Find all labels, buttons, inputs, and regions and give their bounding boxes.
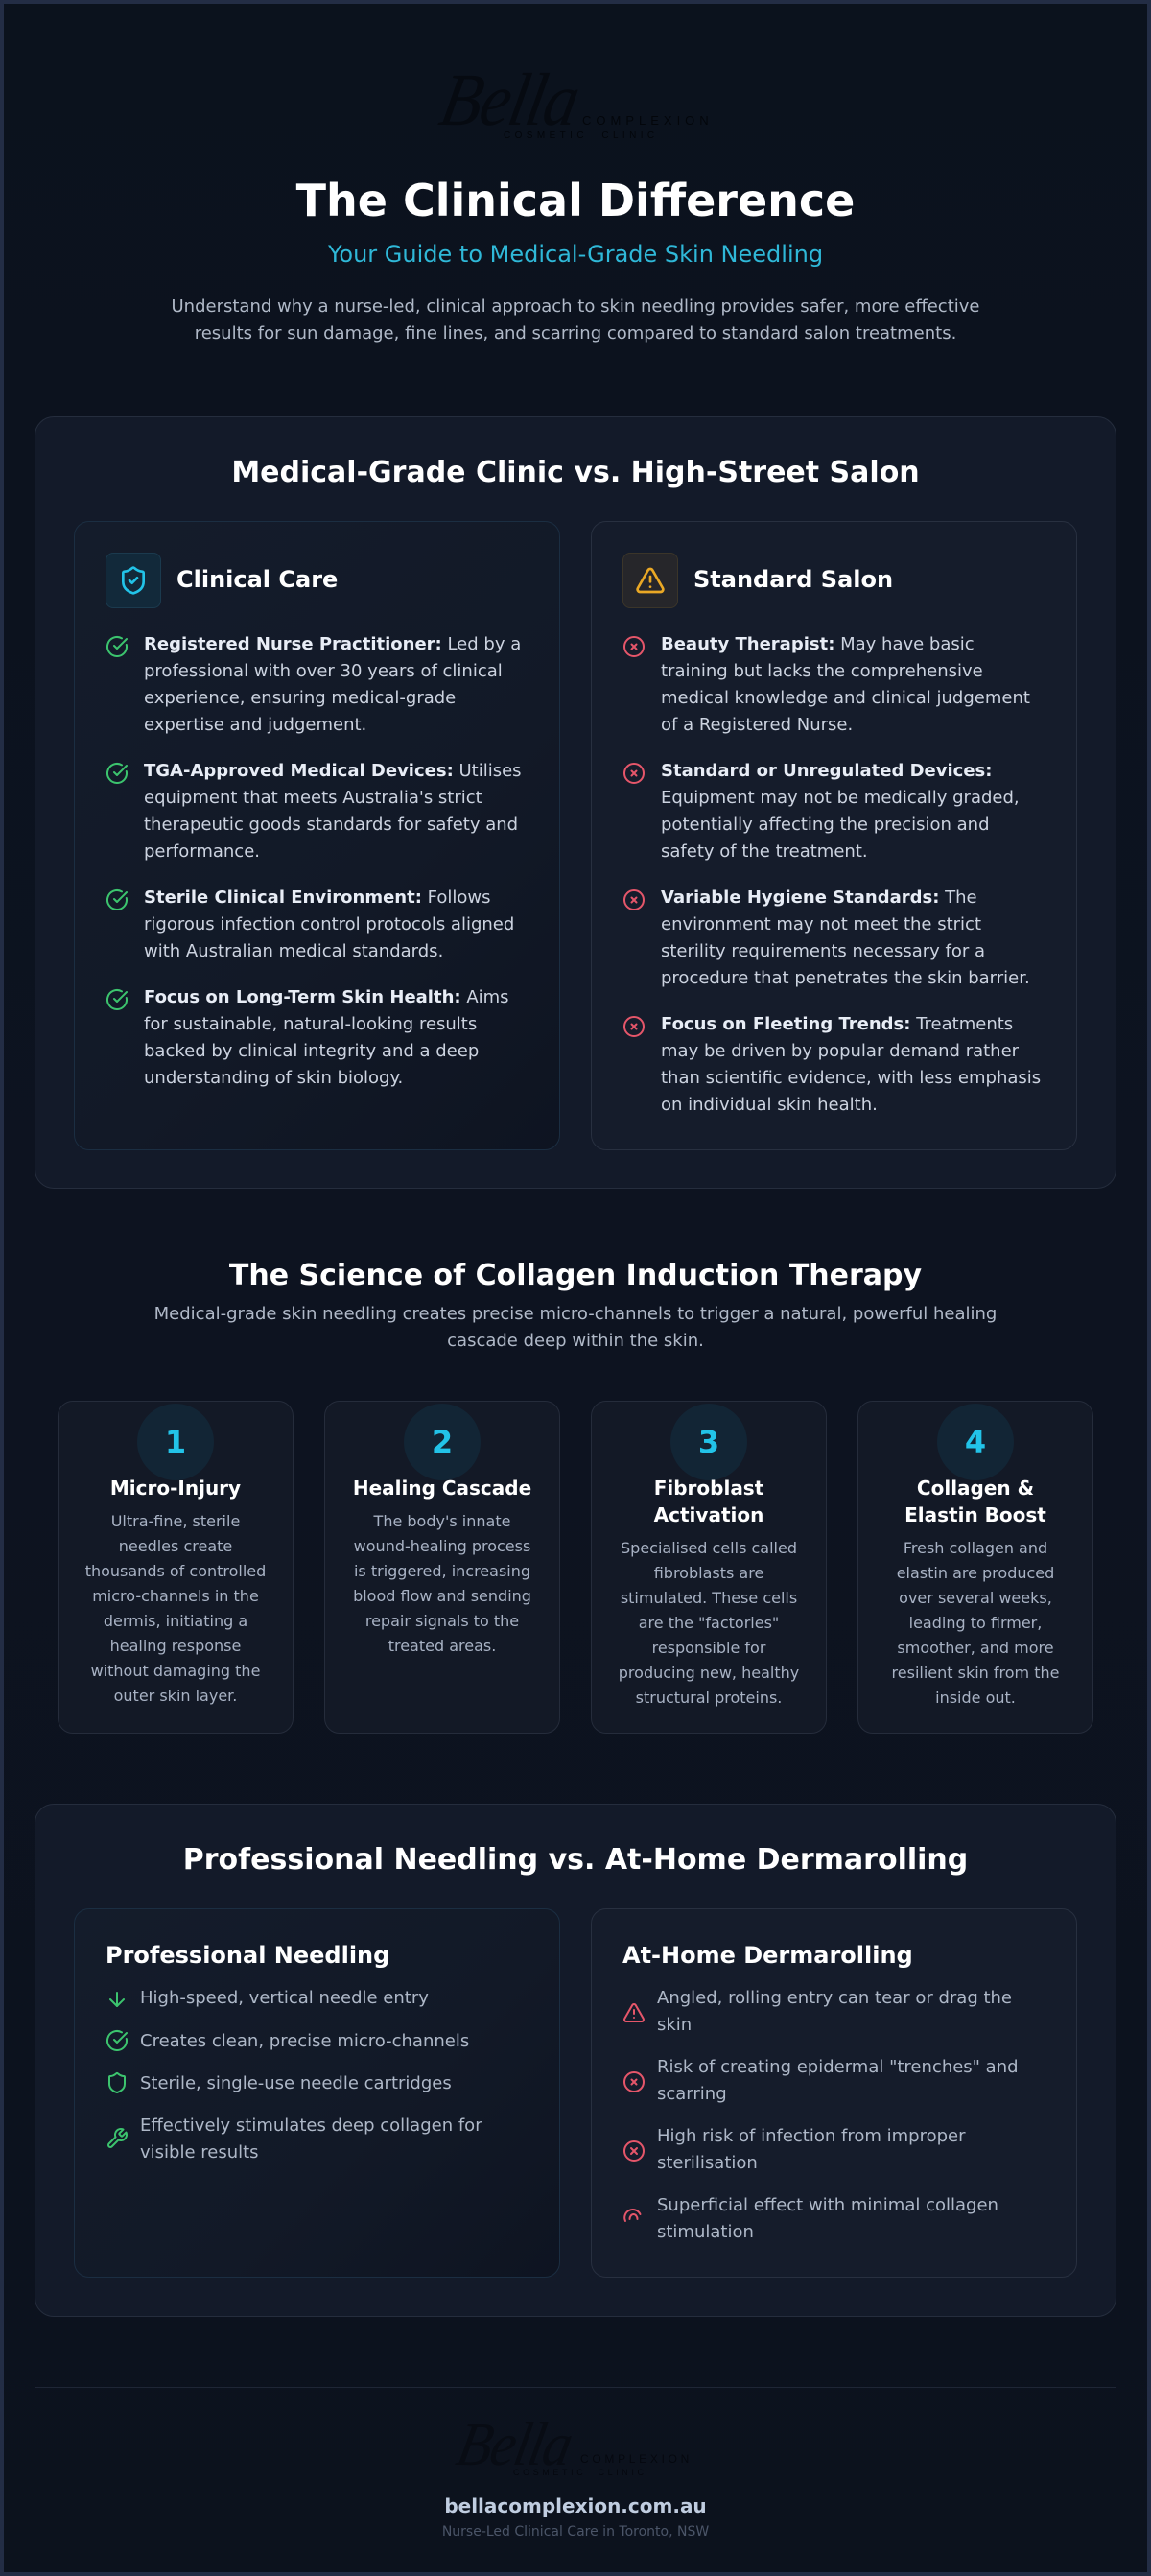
- list item: sterile environment: rigorous infection control protocols aligned: [144, 914, 514, 934]
- heading: at-home dermarolling: At-Home Dermarolling: [622, 1942, 913, 1969]
- list item: sterile environment: with Australian medical standards.: [144, 941, 443, 961]
- step text: Fresh collagen and: [904, 1539, 1047, 1557]
- step text: repair signals to the: [365, 1612, 519, 1630]
- list item: unregulated devices: Standard or Unregulated Devices:: [661, 760, 992, 781]
- step title: Activation: [654, 1503, 763, 1526]
- item: superficial effect: stimulation: [657, 2222, 754, 2242]
- footer logo: COMPLEXION: [580, 2452, 693, 2466]
- step text: producing new, healthy: [619, 1664, 799, 1682]
- step 3 card: [591, 1401, 827, 1734]
- icon: cross: [623, 636, 645, 657]
- item: superficial effect: [657, 2195, 998, 2242]
- step text: structural proteins.: [636, 1689, 782, 1707]
- list item: beauty therapist: of a Registered Nurse.: [661, 715, 853, 735]
- list item: long-term skin health: Focus on Long-Term Skin Health: Aims: [144, 986, 509, 1007]
- list item: beauty therapist: Beauty Therapist: May have basic: [661, 633, 975, 654]
- list item: hygiene: [661, 886, 1030, 988]
- step 1 card: [58, 1401, 294, 1734]
- list item: registered nurse: experience, ensuring medical-grade: [144, 688, 456, 708]
- intro text: results for sun damage, fine lines, and scarring compared to standard salon treatments.: [195, 323, 956, 343]
- header logo: COMPLEXION: [582, 113, 714, 128]
- list item: unregulated devices: potentially affecting the precision and: [661, 815, 990, 835]
- list item: beauty therapist: medical knowledge and clinical judgement: [661, 688, 1030, 708]
- science intro text: Medical-grade skin needling creates precise micro-channels to trigger a natural, powerful healing: [154, 1304, 997, 1324]
- list item: beauty therapist: training but lacks the comprehensive: [661, 661, 983, 681]
- step title: Micro-Injury: [110, 1477, 241, 1500]
- list item: sterile environment: [144, 886, 514, 961]
- list item: TGA devices: [144, 760, 522, 862]
- list item: fleeting trends: than scientific evidence, with less emphasis: [661, 1068, 1041, 1088]
- icon: check: [106, 988, 128, 1010]
- list item: registered nurse: professional with over 30 years of clinical: [144, 661, 503, 681]
- footer logo: [452, 2410, 693, 2478]
- list item: hygiene: environment may not meet the strict: [661, 914, 981, 934]
- item: cartridges: Sterile, single-use needle cartridges: [140, 2072, 452, 2093]
- heading: needling vs dermarolling: Professional Needling vs. At-Home Dermarolling: [183, 1842, 968, 1877]
- list item: long-term skin health: backed by clinical integrity and a deep: [144, 1041, 479, 1061]
- list item: registered nurse: Registered Nurse Practitioner: Led by a: [144, 633, 521, 654]
- icon: cross: [623, 763, 645, 784]
- step text: treated areas.: [388, 1637, 496, 1655]
- step 2 card: [324, 1401, 560, 1734]
- step text: responsible for: [652, 1639, 765, 1657]
- step text: [619, 1539, 799, 1707]
- list item: registered nurse: expertise and judgement.: [144, 715, 366, 735]
- step title: Fibroblast: [654, 1477, 763, 1500]
- step text: healing response: [110, 1637, 241, 1655]
- heading: clinic vs salon: Medical-Grade Clinic vs. High-Street Salon: [231, 455, 920, 489]
- step text: [353, 1512, 531, 1655]
- item: infection: High risk of infection from improper: [657, 2126, 965, 2146]
- item: deep collagen: [140, 2115, 482, 2162]
- list item: sterile environment: Sterile Clinical Environment: Follows: [144, 886, 490, 908]
- icon: cross: [623, 889, 645, 910]
- step text: resilient skin from the: [892, 1664, 1059, 1682]
- step text: blood flow and sending: [353, 1587, 531, 1605]
- footer logo: COSMETIC CLINIC: [513, 2468, 647, 2477]
- list item: TGA devices: therapeutic goods standards for safety and: [144, 815, 518, 835]
- panel: clinic vs salon: [35, 416, 1116, 1189]
- list item: TGA devices: equipment that meets Australia's strict: [144, 788, 482, 808]
- card: at-home dermarolling: [591, 1908, 1077, 2278]
- icon: warning: [623, 2003, 645, 2022]
- list item: long-term skin health: understanding of skin biology.: [144, 1068, 403, 1088]
- header logo: Bella: [434, 58, 585, 141]
- heading: collagen science: The Science of Collagen Induction Therapy: [229, 1259, 922, 1292]
- step text: is triggered, increasing: [354, 1562, 530, 1580]
- step text: elastin are produced: [897, 1564, 1054, 1582]
- step number: [137, 1404, 214, 1480]
- step number: 3: [698, 1424, 719, 1460]
- item: angled entry: skin: [657, 2015, 692, 2035]
- step text: dermis, initiating a: [104, 1612, 247, 1630]
- icon: wrench: [107, 2128, 128, 2148]
- item: superficial effect: Superficial effect with minimal collagen: [657, 2195, 998, 2215]
- icon: warning triangle: [622, 553, 678, 608]
- title: The Clinical Difference: [296, 175, 855, 226]
- item: micro-channels: Creates clean, precise micro-channels: [140, 2030, 469, 2051]
- icon: cross: [623, 2140, 645, 2162]
- step title: [654, 1477, 763, 1526]
- step text: without damaging the: [91, 1662, 260, 1680]
- step number: [670, 1404, 747, 1480]
- list item: beauty therapist: [661, 633, 1030, 735]
- science intro text: cascade deep within the skin.: [447, 1331, 704, 1351]
- icon: cross: [623, 1016, 645, 1037]
- step number: [937, 1404, 1014, 1480]
- icon: gauge: [623, 2209, 641, 2222]
- list item: long-term skin health: for sustainable, natural-looking results: [144, 1014, 477, 1034]
- item: trenches: scarring: [657, 2084, 727, 2104]
- card: standard salon: [591, 521, 1077, 1150]
- list item: hygiene: procedure that penetrates the skin barrier.: [661, 968, 1030, 988]
- item: angled entry: Angled, rolling entry can tear or drag the: [657, 1988, 1012, 2008]
- list item: unregulated devices: Equipment may not be medically graded,: [661, 788, 1020, 808]
- step title: Healing Cascade: [353, 1477, 531, 1500]
- icon: check: [106, 635, 128, 657]
- step text: [85, 1512, 266, 1705]
- item: vertical entry: High-speed, vertical needle entry: [140, 1988, 429, 2008]
- footer logo: Bella: [452, 2410, 577, 2478]
- item: trenches: Risk of creating epidermal "trenches" and: [657, 2057, 1019, 2077]
- header logo: [434, 58, 714, 141]
- icon: check: [106, 762, 128, 784]
- card: clinical care: [74, 521, 560, 1150]
- step text: Ultra-fine, sterile: [111, 1512, 240, 1530]
- panel: needling vs dermarolling: [35, 1804, 1116, 2317]
- footer website: bellacomplexion.com.au: [444, 2494, 707, 2517]
- step text: [892, 1539, 1059, 1707]
- science intro text: [154, 1304, 997, 1351]
- step text: stimulated. These cells: [621, 1589, 797, 1607]
- icon: arrow down: [109, 1992, 125, 2007]
- item: deep collagen: visible results: [140, 2142, 259, 2162]
- list item: unregulated devices: safety of the treatment.: [661, 841, 868, 862]
- heading: clinical care: Clinical Care: [176, 566, 338, 593]
- step text: outer skin layer.: [114, 1687, 237, 1705]
- step text: inside out.: [935, 1689, 1016, 1707]
- step text: thousands of controlled: [85, 1562, 266, 1580]
- step text: leading to firmer,: [909, 1614, 1042, 1632]
- step text: wound-healing process: [354, 1537, 530, 1555]
- list item: hygiene: Variable Hygiene Standards: The: [661, 886, 977, 908]
- step number: 1: [165, 1424, 186, 1460]
- step number: [404, 1404, 481, 1480]
- item: angled entry: [657, 1988, 1012, 2035]
- step 4 card: [857, 1401, 1093, 1734]
- list item: fleeting trends: on individual skin health.: [661, 1095, 878, 1115]
- subtitle: Your Guide to Medical-Grade Skin Needling: [328, 241, 823, 268]
- list item: TGA devices: TGA-Approved Medical Devices: Utilises: [144, 760, 522, 781]
- step number: 4: [965, 1424, 986, 1460]
- step text: Specialised cells called: [621, 1539, 797, 1557]
- list item: hygiene: sterility requirements necessary for a: [661, 941, 985, 961]
- item: deep collagen: Effectively stimulates deep collagen for: [140, 2115, 482, 2136]
- footer tagline: Nurse-Led Clinical Care in Toronto, NSW: [442, 2524, 709, 2540]
- header logo: COSMETIC CLINIC: [504, 130, 659, 141]
- icon: check: [106, 2030, 128, 2051]
- list item: fleeting trends: may be driven by popular demand rather: [661, 1041, 1019, 1061]
- item: trenches: [657, 2057, 1019, 2104]
- step text: fibroblasts are: [654, 1564, 763, 1582]
- step title: Collagen &: [917, 1477, 1034, 1500]
- list item: TGA devices: performance.: [144, 841, 260, 862]
- step text: over several weeks,: [899, 1589, 1052, 1607]
- icon: shield: [108, 2072, 126, 2093]
- list item: unregulated devices: [661, 760, 1020, 862]
- list item: long-term skin health: [144, 986, 509, 1088]
- card: professional needling: [74, 1908, 560, 2278]
- icon: shield check: [106, 553, 161, 608]
- intro text: Understand why a nurse-led, clinical approach to skin needling provides safer, more effective: [171, 295, 980, 317]
- list item: fleeting trends: [661, 1013, 1041, 1115]
- list item: registered nurse: [144, 633, 521, 735]
- heading: standard salon: Standard Salon: [693, 566, 893, 593]
- icon: check: [106, 888, 128, 910]
- intro text: [171, 295, 980, 343]
- step text: are the "factories": [639, 1614, 779, 1632]
- list item: fleeting trends: Focus on Fleeting Trends: Treatments: [661, 1013, 1013, 1034]
- footer rule: [35, 2387, 1116, 2388]
- step title: [904, 1477, 1046, 1526]
- item: infection: [657, 2126, 965, 2173]
- step number: 2: [432, 1424, 453, 1460]
- heading: professional needling: Professional Needling: [106, 1942, 389, 1969]
- step text: smoother, and more: [897, 1639, 1054, 1657]
- step text: micro-channels in the: [92, 1587, 259, 1605]
- icon: cross: [623, 2071, 645, 2092]
- step title: Elastin Boost: [904, 1503, 1046, 1526]
- item: infection: sterilisation: [657, 2153, 758, 2173]
- step text: The body's innate: [374, 1512, 510, 1530]
- step text: needles create: [119, 1537, 232, 1555]
